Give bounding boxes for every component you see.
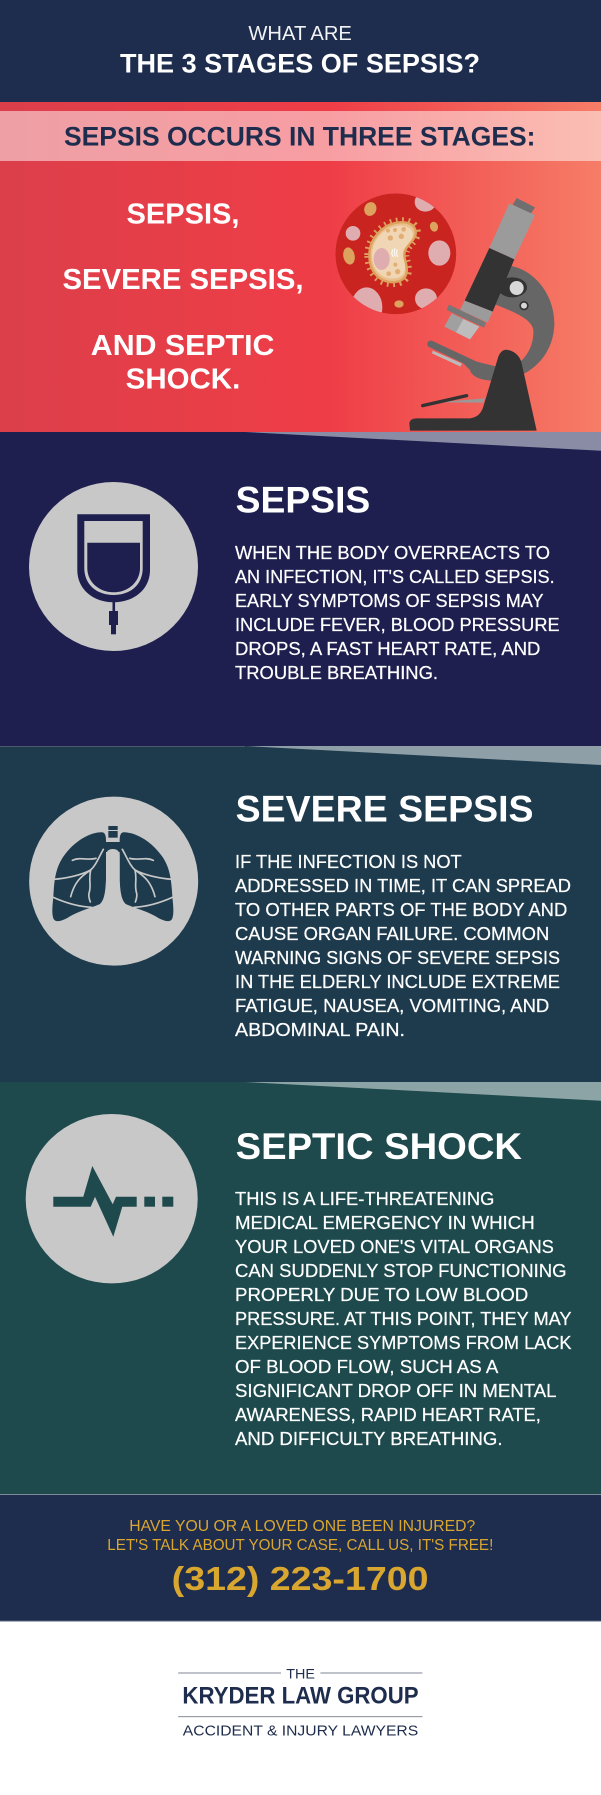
heading: septic shock: SEPTIC SHOCK <box>236 1126 522 1167</box>
text: severe sepsis description <box>235 852 571 1040</box>
text: septic shock description: PRESSURE. AT THIS POINT, THEY MAY <box>235 1309 572 1329</box>
list of three stages: SEPSIS, <box>126 198 240 230</box>
title kicker: WHAT ARE <box>248 23 352 45</box>
text: severe sepsis description: TO OTHER PARTS OF THE BODY AND <box>235 900 567 920</box>
panel: call to action <box>0 1494 601 1622</box>
text: septic shock description <box>235 1189 572 1449</box>
text: septic shock description: CAN SUDDENLY STOP FUNCTIONING <box>235 1261 566 1281</box>
text: severe sepsis description: ADDRESSED IN TIME, IT CAN SPREAD <box>235 876 571 896</box>
panel: sepsis <box>0 432 601 746</box>
text: sepsis description: WHEN THE BODY OVERREACTS TO <box>235 543 550 563</box>
icon: lungs <box>29 797 198 966</box>
text: severe sepsis description: CAUSE ORGAN FAILURE. COMMON <box>235 924 549 944</box>
text: septic shock description: EXPERIENCE SYMPTOMS FROM LACK <box>235 1333 572 1353</box>
subheading band: SEPSIS OCCURS IN THREE STAGES: <box>64 121 536 151</box>
text: sepsis description: EARLY SYMPTOMS OF SEPSIS MAY <box>235 591 544 611</box>
list of three stages: SHOCK. <box>126 363 240 395</box>
list of three stages: AND SEPTIC <box>91 330 274 362</box>
heading: severe sepsis: SEVERE SEPSIS <box>236 789 533 830</box>
panel: title header <box>0 0 601 102</box>
panel: introduction <box>0 102 601 432</box>
list of three stages: SEVERE SEPSIS, <box>62 264 304 296</box>
panel: severe sepsis <box>0 746 601 1082</box>
icon: IV bag <box>29 482 198 651</box>
logo: The Kryder Law Group: THE <box>286 1666 315 1682</box>
text: septic shock description: YOUR LOVED ONE'S VITAL ORGANS <box>235 1237 554 1257</box>
logo: The Kryder Law Group: ACCIDENT & INJURY LAWYERS <box>183 1722 418 1739</box>
text: septic shock description: AWARENESS, RAPID HEART RATE, <box>235 1405 541 1425</box>
main title: THE 3 STAGES OF SEPSIS? <box>120 49 480 79</box>
text: septic shock description: MEDICAL EMERGENCY IN WHICH <box>235 1213 535 1233</box>
text: septic shock description: THIS IS A LIFE-THREATENING <box>235 1189 494 1209</box>
text: severe sepsis description: FATIGUE, NAUSEA, VOMITING, AND <box>235 996 549 1016</box>
text: call to action <box>107 1518 493 1554</box>
text: sepsis description: AN INFECTION, IT'S CALLED SEPSIS. <box>235 567 555 587</box>
icon: heartbeat pulse <box>26 1114 198 1283</box>
logo: The Kryder Law Group <box>178 1666 422 1739</box>
text: sepsis description <box>235 543 560 683</box>
logo: The Kryder Law Group: KRYDER LAW GROUP <box>182 1682 419 1709</box>
text: septic shock description: SIGNIFICANT DROP OFF IN MENTAL <box>235 1381 556 1401</box>
icon: magnified bacterium <box>336 194 456 314</box>
phone number: (312) 223-1700 <box>172 1560 428 1597</box>
icon: microscope <box>409 198 554 431</box>
text: sepsis description: DROPS, A FAST HEART RATE, AND <box>235 639 540 659</box>
text: septic shock description: OF BLOOD FLOW, SUCH AS A <box>235 1357 498 1377</box>
text: severe sepsis description: WARNING SIGNS OF SEVERE SEPSIS <box>235 948 560 968</box>
text: severe sepsis description: ABDOMINAL PAIN. <box>235 1020 405 1040</box>
panel: septic shock <box>0 1082 601 1494</box>
subheading band <box>0 111 601 161</box>
text: sepsis description: TROUBLE BREATHING. <box>235 663 438 683</box>
text: sepsis description: INCLUDE FEVER, BLOOD PRESSURE <box>235 615 560 635</box>
text: severe sepsis description: IN THE ELDERLY INCLUDE EXTREME <box>235 972 560 992</box>
heading: sepsis: SEPSIS <box>236 479 370 520</box>
text: call to action: LET'S TALK ABOUT YOUR CASE, CALL US, IT'S FREE! <box>107 1537 493 1554</box>
text: severe sepsis description: IF THE INFECTION IS NOT <box>235 852 462 872</box>
text: call to action: HAVE YOU OR A LOVED ONE BEEN INJURED? <box>129 1518 475 1535</box>
list of three stages <box>62 198 304 395</box>
text: septic shock description: AND DIFFICULTY BREATHING. <box>235 1429 502 1449</box>
text: septic shock description: PROPERLY DUE TO LOW BLOOD <box>235 1285 528 1305</box>
